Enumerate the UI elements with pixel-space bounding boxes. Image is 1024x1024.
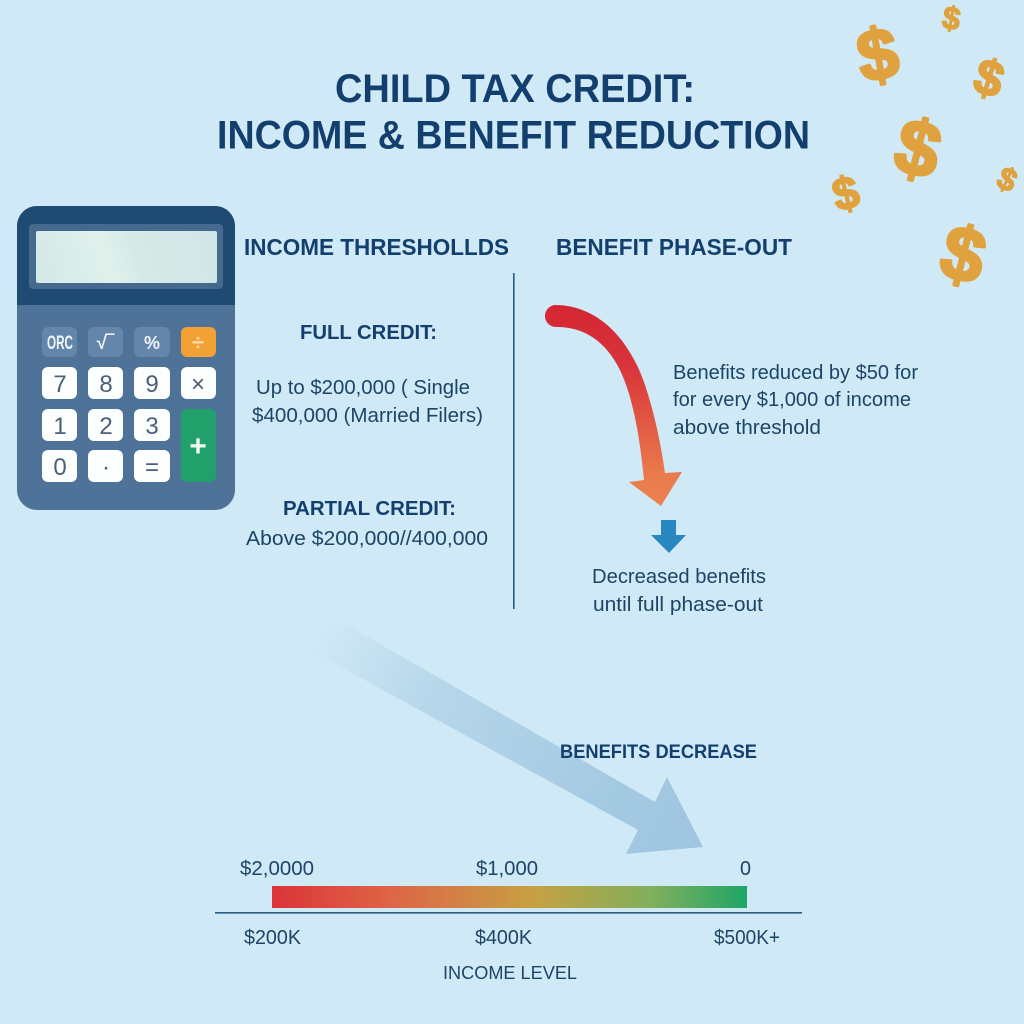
- text: decreased benefits: Decreased benefits: [592, 566, 766, 588]
- text: decreased benefits: [592, 566, 766, 616]
- text: decreased benefits: until full phase-out: [593, 594, 763, 616]
- calculator plus key: +: [189, 430, 207, 463]
- calculator function keys: ORC: [47, 333, 73, 354]
- icon: falling dollar signs: $: [967, 47, 1011, 109]
- icon: falling dollar signs: $: [851, 12, 904, 98]
- gradient bar: [272, 886, 747, 908]
- icon: calculator: [17, 206, 235, 510]
- benefit amount labels: $2,0000: [240, 858, 314, 880]
- arrow: red curved phase-out: [545, 305, 682, 506]
- text: full credit: $400,000 (Married Filers): [252, 405, 483, 427]
- arrow: small blue down: [651, 520, 686, 553]
- axis line: [215, 912, 802, 914]
- divider: [513, 273, 515, 609]
- calculator function keys: [42, 327, 216, 357]
- text: partial credit: [246, 498, 488, 550]
- calculator number keys: 9: [145, 371, 159, 398]
- icon: falling dollar signs: $: [940, 0, 963, 37]
- text: full credit: Up to $200,000 ( Single: [256, 377, 470, 399]
- arrow: large fading benefits decrease: [310, 617, 703, 854]
- text: full credit: FULL CREDIT:: [300, 322, 437, 344]
- calculator number keys: 0: [53, 454, 67, 481]
- calculator function keys: %: [144, 333, 160, 353]
- icon: falling dollar signs: $: [991, 159, 1023, 199]
- calculator number keys: [42, 367, 216, 482]
- income labels: $200K: [244, 927, 302, 949]
- text: partial credit: PARTIAL CREDIT:: [283, 498, 456, 520]
- benefit amount labels: [240, 858, 751, 880]
- calculator number keys: =: [145, 454, 159, 481]
- calculator number keys: 3: [145, 413, 159, 440]
- income labels: [244, 927, 780, 949]
- text: full credit: [252, 322, 483, 427]
- benefit amount labels: $1,000: [476, 858, 538, 880]
- axis title: INCOME LEVEL: [443, 963, 577, 983]
- benefit amount labels: 0: [740, 858, 751, 880]
- label: benefits decrease: BENEFITS DECREASE: [560, 742, 757, 763]
- calculator function keys: √‾: [97, 333, 115, 354]
- income labels: $400K: [475, 927, 533, 949]
- title: CHILD TAX CREDIT:: [335, 67, 695, 111]
- income labels: $500K+: [714, 927, 780, 949]
- text: benefit reduction explanation: [673, 362, 918, 439]
- calculator function keys: ÷: [192, 330, 204, 355]
- icon: falling dollar signs: [827, 0, 1023, 301]
- text: benefit reduction explanation: above threshold: [673, 417, 821, 439]
- text: benefit reduction explanation: Benefits reduced by $50 for: [673, 362, 918, 384]
- chart: income and benefit gradient scale: [215, 858, 802, 983]
- calculator number keys: 2: [99, 413, 113, 440]
- icon: falling dollar signs: $: [827, 165, 864, 221]
- calculator number keys: ×: [191, 371, 205, 398]
- heading: income thresholds: INCOME THRESHOLLDS: [244, 234, 509, 260]
- text: benefit reduction explanation: for every $1,000 of income: [673, 389, 911, 411]
- calculator number keys: ·: [102, 454, 110, 481]
- icon: falling dollar signs: $: [932, 209, 994, 301]
- calculator plus key: [181, 409, 216, 482]
- calculator number keys: 8: [99, 371, 113, 398]
- title: INCOME & BENEFIT REDUCTION: [217, 114, 810, 158]
- heading: benefit phase-out: BENEFIT PHASE-OUT: [556, 234, 793, 260]
- icon: falling dollar signs: $: [886, 100, 950, 196]
- text: partial credit: Above $200,000//400,000: [246, 528, 488, 550]
- title: [217, 67, 810, 158]
- calculator number keys: 7: [53, 371, 67, 398]
- calculator number keys: 1: [53, 413, 67, 440]
